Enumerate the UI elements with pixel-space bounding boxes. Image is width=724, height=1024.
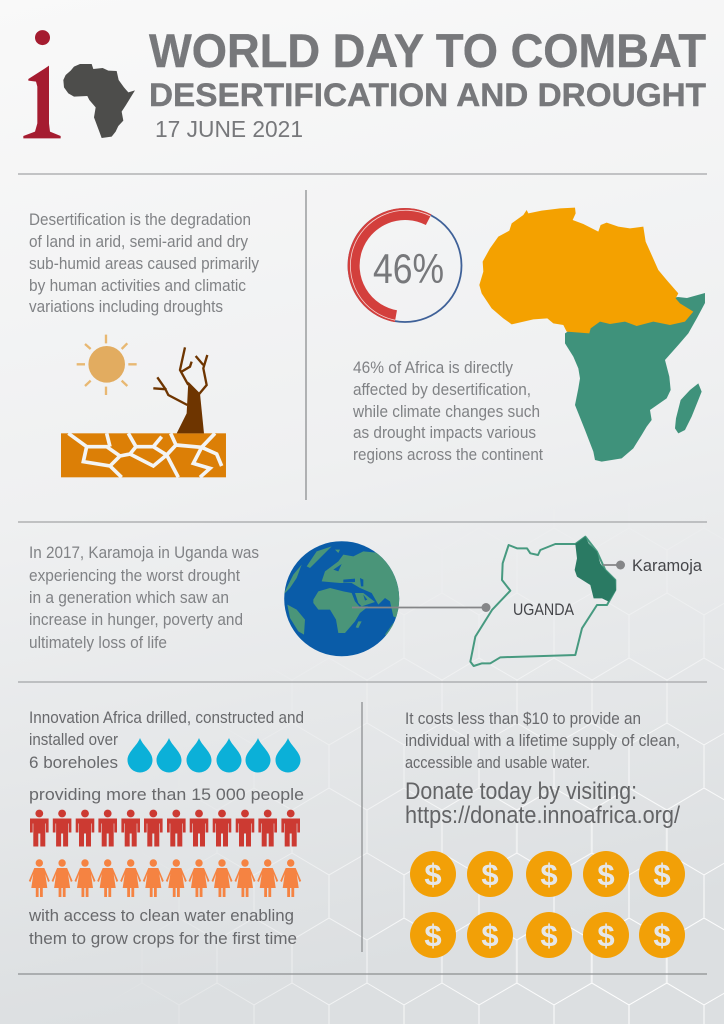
text: definition of desertification: Desertification is the degradation [29, 211, 251, 229]
icons: ten dollar coins [410, 851, 685, 958]
text: Karamoja drought: increase in hunger, poverty and [29, 611, 243, 629]
icons: ten dollar coins: $ [481, 857, 499, 892]
icons: ten dollar coins: $ [653, 918, 671, 953]
text: access to clean water [28, 906, 297, 948]
text: access to clean water: with access to clean water enabling [28, 906, 294, 925]
icon: globe [283, 541, 403, 656]
title [149, 24, 706, 142]
callout: Karamoja: Karamoja [632, 556, 703, 575]
text: boreholes intro: 6 boreholes [29, 753, 118, 772]
connector: globe to Uganda [352, 603, 490, 612]
icons: ten dollar coins: $ [597, 857, 615, 892]
text: donate call to action: https://donate.innoafrica.org/ [405, 802, 680, 829]
text: boreholes intro: installed over [29, 730, 118, 749]
map: Africa, north and south regions [479, 208, 705, 462]
text: donate call to action: Donate today by visiting: [405, 778, 637, 805]
text: donate call to action [405, 778, 680, 829]
text: boreholes intro [29, 708, 304, 772]
icons: ten dollar coins: $ [540, 918, 558, 953]
text: Karamoja drought: experiencing the worst drought [29, 567, 240, 585]
text: 46% of Africa: regions across the continent [353, 446, 543, 464]
title: 17 JUNE 2021 [155, 116, 303, 142]
text: cost per person [405, 709, 680, 772]
text: definition of desertification: by human activities and climatic [29, 277, 246, 295]
label: UGANDA: UGANDA [513, 600, 575, 619]
text: definition of desertification: variations including droughts [29, 298, 223, 316]
text: Karamoja drought: ultimately loss of life [29, 634, 167, 652]
icons: six water drops [128, 738, 300, 772]
text: definition of desertification: of land in arid, semi-arid and dry [29, 233, 249, 251]
text: 46% of Africa: 46% of Africa is directly [353, 359, 514, 377]
text: people reached: providing more than 15 000 people [29, 785, 304, 804]
chart: 46% ring: 46% [373, 245, 444, 292]
text: Karamoja drought [29, 544, 259, 652]
text: boreholes intro: Innovation Africa drilled, constructed and [29, 708, 304, 727]
text: cost per person: individual with a lifetime supply of clean, [405, 731, 680, 750]
callout: Karamoja [603, 556, 703, 575]
text: Karamoja drought: in a generation which saw an [29, 589, 229, 607]
icons: ten dollar coins: $ [597, 918, 615, 953]
icon: sun [77, 335, 137, 395]
icons: ten dollar coins: $ [424, 857, 442, 892]
chart: 46% ring [348, 209, 462, 322]
text: cost per person: accessible and usable water. [405, 753, 590, 772]
text: 46% of Africa [352, 359, 543, 464]
text: 46% of Africa: as drought impacts various [353, 424, 536, 442]
icons: ten dollar coins: $ [424, 918, 442, 953]
text: Karamoja drought: In 2017, Karamoja in Uganda was [29, 544, 259, 562]
text: 46% of Africa: affected by desertification, [353, 381, 531, 399]
text: cost per person: It costs less than $10 to provide an [405, 709, 641, 728]
map: Uganda with Karamoja highlighted [470, 537, 616, 666]
logo: Innovation Africa [23, 30, 135, 138]
text: definition of desertification: sub-humid areas caused primarily [29, 255, 260, 273]
icons: row of men [30, 810, 300, 846]
title: DESERTIFICATION AND DROUGHT [149, 77, 706, 113]
icons: row of women [29, 859, 301, 897]
text: definition of desertification [29, 211, 260, 316]
icon: cracked earth and dead tree [61, 347, 226, 477]
icons: ten dollar coins: $ [481, 918, 499, 953]
icons: ten dollar coins: $ [540, 857, 558, 892]
text: 46% of Africa: while climate changes such [352, 403, 540, 421]
title: WORLD DAY TO COMBAT [149, 24, 706, 77]
text: access to clean water: them to grow crops for the first time [29, 929, 297, 948]
icons: ten dollar coins: $ [653, 857, 671, 892]
